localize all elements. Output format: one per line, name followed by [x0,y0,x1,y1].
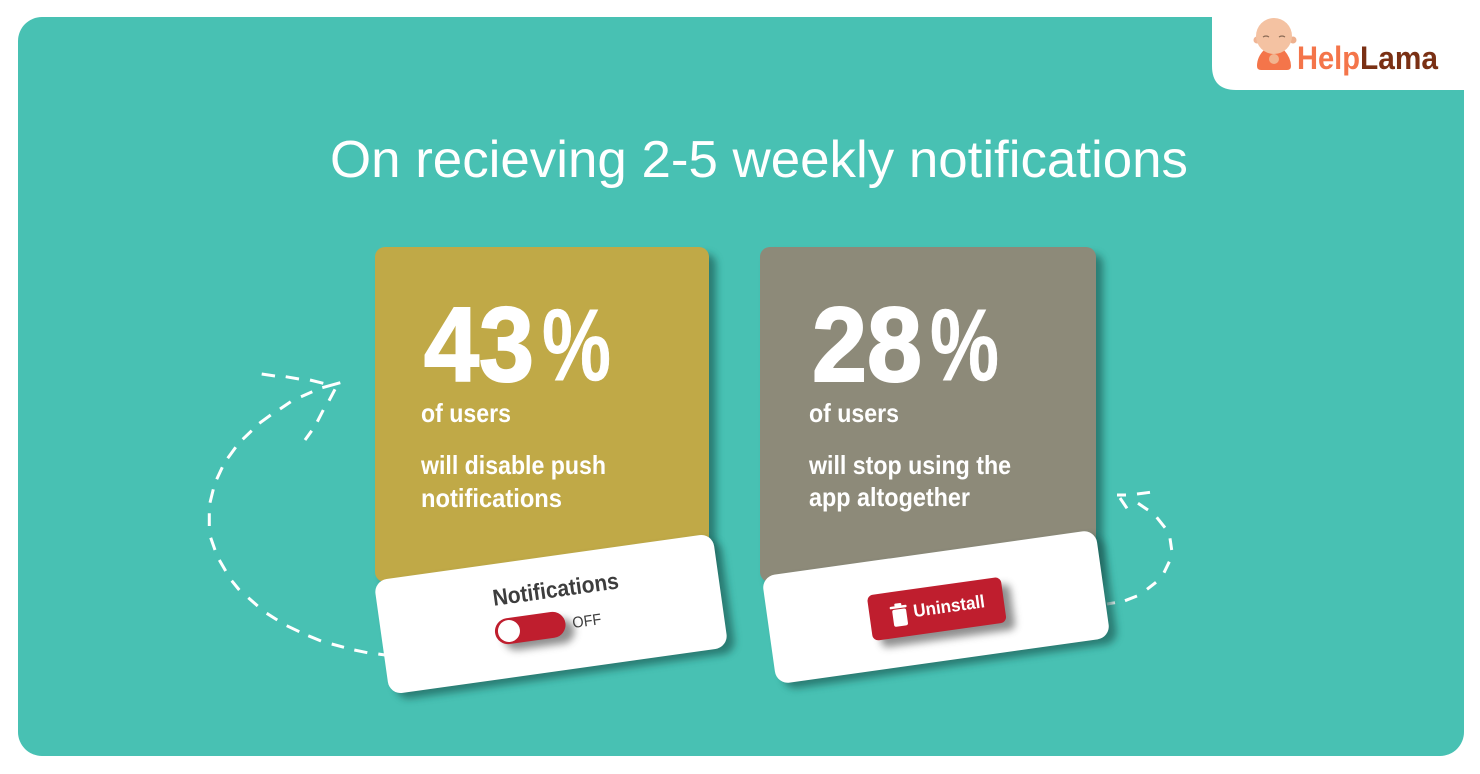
toggle switch [493,609,576,653]
stat: 28%: % [930,288,999,402]
button: uninstall [867,576,1016,649]
text: will stop using the app altogether: app altogether [809,482,970,512]
text: will disable push notifications: will disable push [420,450,606,480]
label: Notifications: Notifications [491,567,620,611]
text: will stop using the app altogether [808,450,1011,512]
text: will stop using the app altogether: will stop using the [808,450,1011,480]
logo: HelpLama [1254,18,1438,76]
text: will disable push notifications [420,450,606,513]
dashed arrow: right [1107,492,1172,604]
logo tab [1212,0,1480,774]
title: On recieving 2-5 weekly notifications [330,131,1188,189]
card: uninstall [762,529,1118,691]
text: of users: of users [421,398,511,428]
stat: 43% [424,286,611,404]
panel: 43% card [375,247,716,589]
stat: 28% [812,286,999,404]
stat: 43%: % [542,288,611,402]
logo: HelpLama: Help [1297,40,1360,76]
panel: 28% card [760,247,1103,589]
text: will disable push notifications: notifications [421,483,562,513]
dashed arrow: left [209,374,385,655]
stat: 43%: 43 [424,286,534,404]
logo: HelpLama: Lama [1360,40,1438,76]
label: Uninstall: Uninstall [912,591,986,621]
stat: 28%: 28 [812,286,922,404]
card: notifications toggle [374,532,736,701]
text: of users: of users [809,398,899,428]
icon: trash can [889,602,909,627]
label: OFF: OFF [571,611,602,632]
